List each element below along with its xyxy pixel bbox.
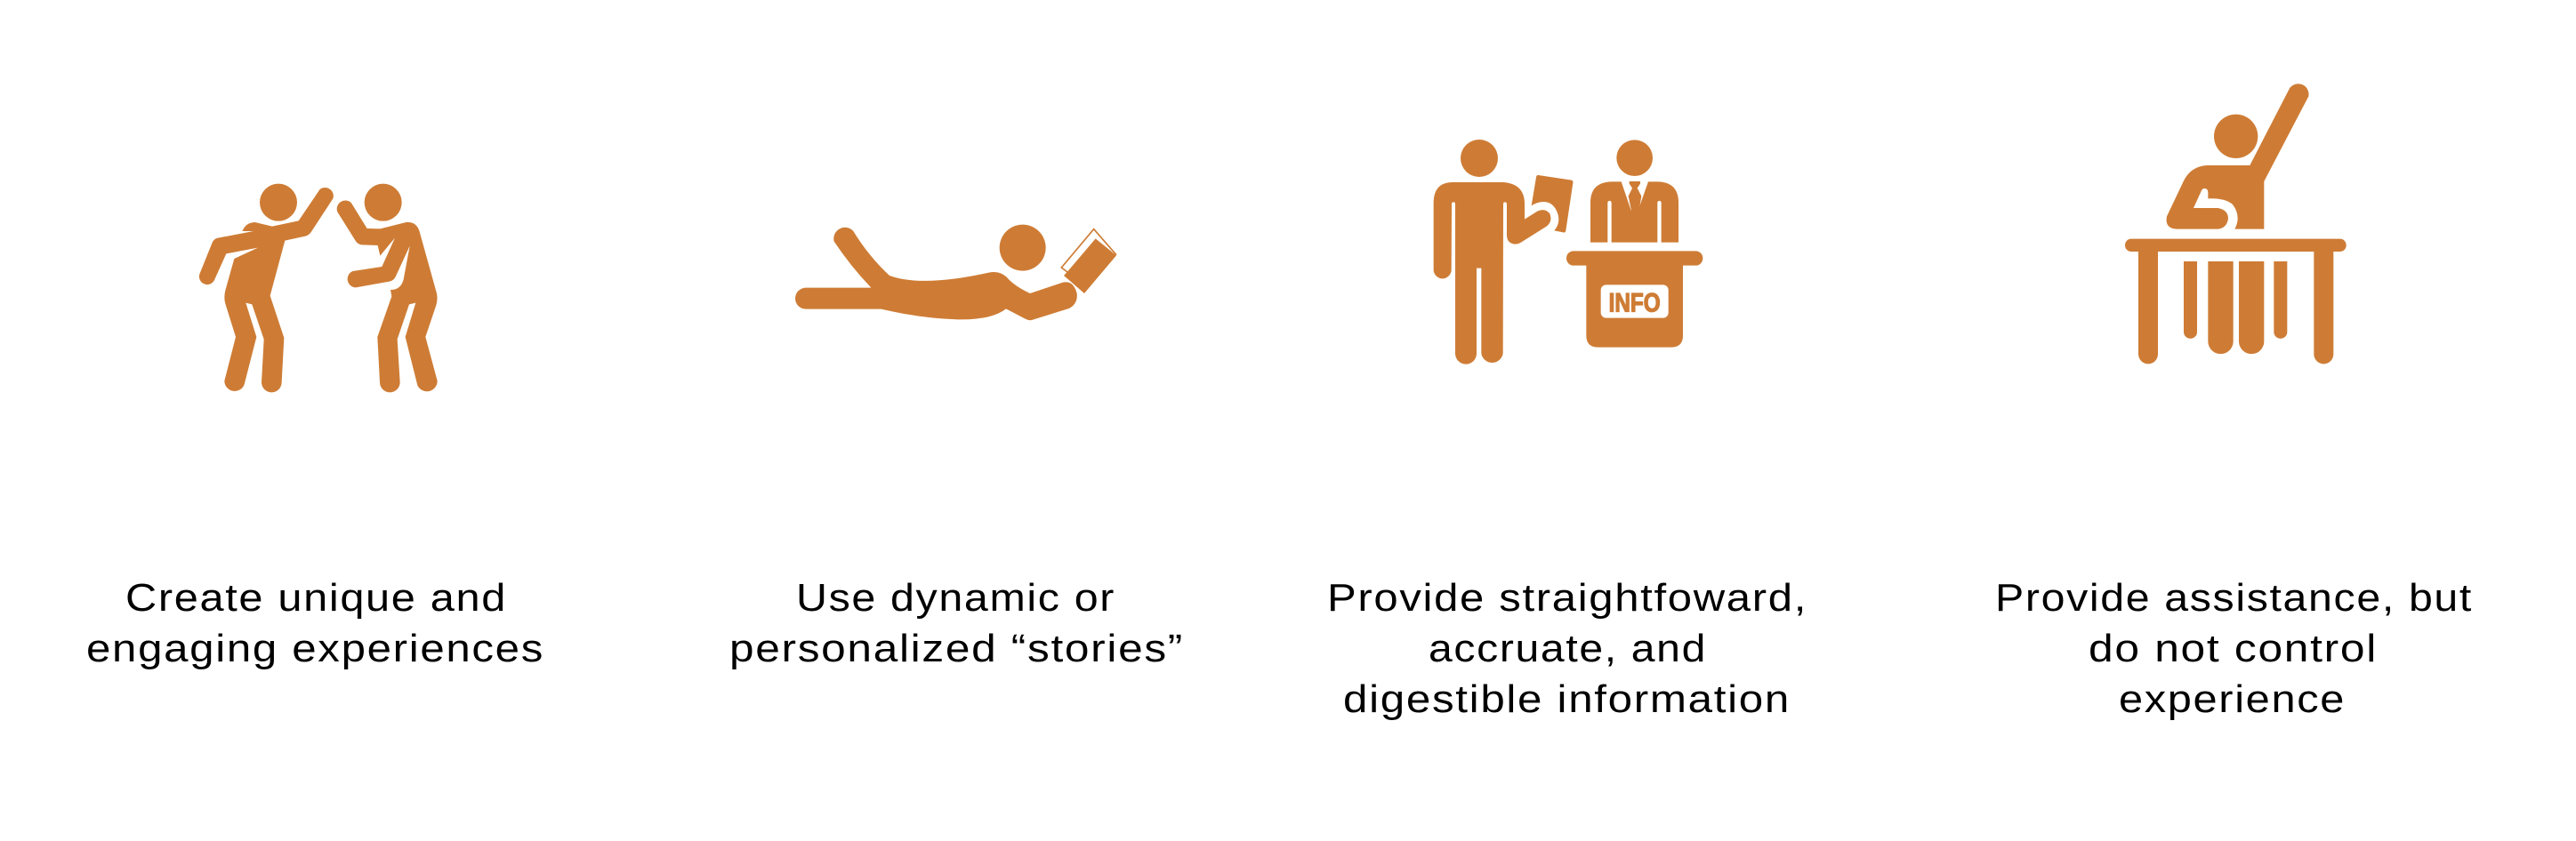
icon: two people high-fiving: [199, 184, 438, 392]
icon: person at an info desk: [1434, 140, 1703, 364]
panel: dynamic or personalized stories: [729, 225, 1184, 670]
panel: unique and engaging experiences: [86, 184, 544, 670]
caption: create unique and engaging experiences: engaging experiences: [86, 627, 544, 670]
panel: straightforward information: [1327, 140, 1807, 721]
caption: provide assistance but do not control experience: Provide assistance, but: [1995, 576, 2473, 620]
caption: provide assistance but do not control experience: do not control: [2089, 627, 2378, 670]
caption: create unique and engaging experiences: Create unique and: [125, 576, 507, 620]
caption: provide assistance but do not control experience: experience: [2119, 677, 2346, 721]
caption: create unique and engaging experiences: [86, 576, 544, 670]
caption: provide straightforward information: Provide straightfoward,: [1327, 576, 1807, 620]
panel: assistance without control: [1995, 84, 2473, 721]
caption: provide straightforward information: digestible information: [1343, 677, 1791, 721]
caption: provide straightforward information: accruate, and: [1429, 627, 1707, 670]
caption: use dynamic or personalized stories: [729, 576, 1184, 670]
caption: use dynamic or personalized stories: Use dynamic or: [796, 576, 1115, 620]
caption: provide straightforward information: [1327, 576, 1807, 721]
caption: use dynamic or personalized stories: personalized “stories”: [729, 627, 1184, 670]
icon: person lying down reading a book: [795, 225, 1116, 320]
icon: person at desk raising a hand: [2125, 84, 2347, 364]
icon: person at an info desk: INFO: [1609, 289, 1661, 318]
caption: provide assistance but do not control experience: [1995, 576, 2473, 721]
